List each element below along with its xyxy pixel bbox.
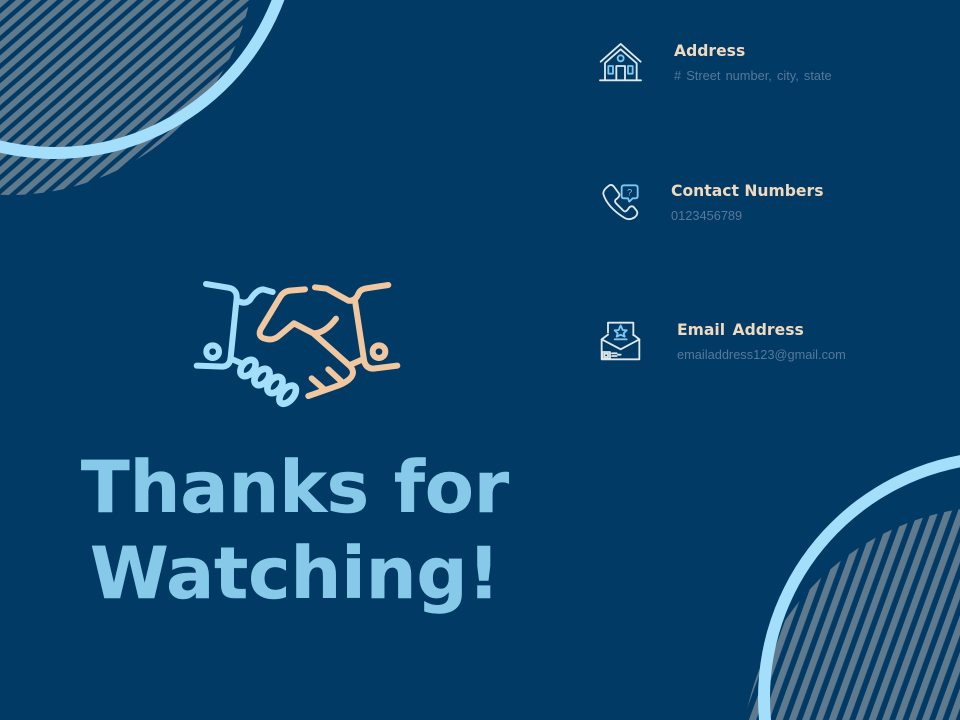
email block <box>677 321 846 362</box>
contact heading: Contact Numbers <box>671 182 823 200</box>
icon: house <box>600 44 641 80</box>
title: Thanks for <box>81 446 509 529</box>
title <box>81 446 510 615</box>
contact number: 0123456789 <box>671 208 742 223</box>
contact block <box>671 182 823 223</box>
address block <box>674 42 832 83</box>
icon: phone with question bubble: ? <box>627 188 632 198</box>
striped circle bottom right <box>745 509 960 720</box>
address text: # Street number, city, state <box>674 68 832 83</box>
icon: handshake <box>197 284 397 407</box>
icon: envelope with star <box>602 323 639 359</box>
email address: emailaddress123@gmail.com <box>677 347 846 362</box>
address heading: Address <box>674 42 745 60</box>
title: Watching! <box>90 532 500 615</box>
ring top left <box>0 0 284 159</box>
striped circle top left <box>0 0 250 195</box>
email heading: Email Address <box>677 321 804 339</box>
icon: phone with question bubble <box>603 185 638 219</box>
ring bottom right <box>758 455 960 720</box>
